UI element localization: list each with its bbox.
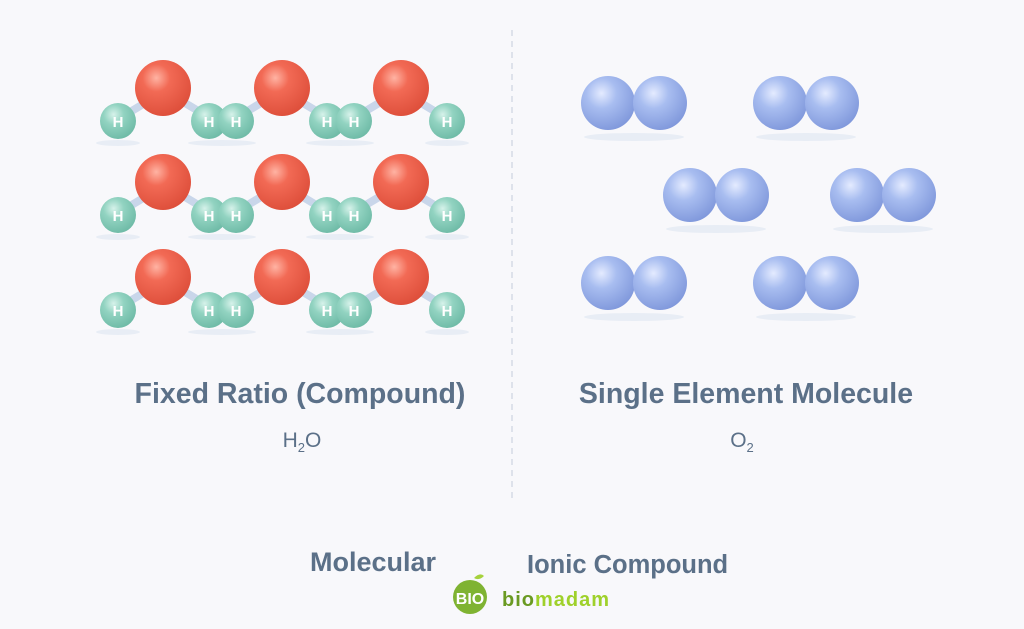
logo: BIO bbox=[456, 591, 484, 608]
label molecular: Molecular bbox=[310, 547, 436, 577]
divider bbox=[511, 30, 513, 500]
formula right: O2 bbox=[730, 429, 754, 455]
label ionic: Ionic Compound bbox=[527, 551, 728, 579]
formula left: H2O bbox=[283, 429, 321, 455]
logo bbox=[453, 574, 487, 614]
water rows bbox=[96, 60, 469, 335]
oxygen molecules bbox=[581, 76, 936, 321]
heading right: Single Element Molecule bbox=[579, 378, 913, 410]
brand text: biomadam bbox=[502, 589, 610, 611]
heading left: Fixed Ratio (Compound) bbox=[135, 378, 465, 410]
